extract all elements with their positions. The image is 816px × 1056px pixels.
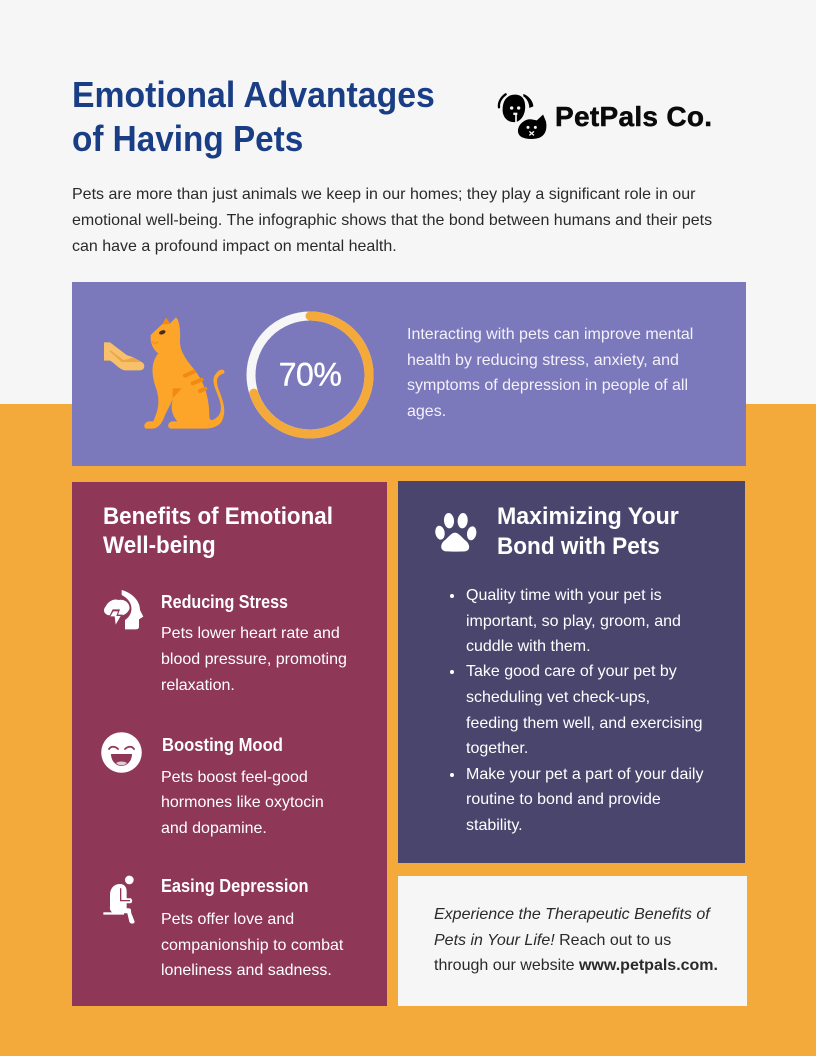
heading: maximizing: Maximizing Your [497, 503, 679, 530]
statistic description: health by reducing stress, anxiety, and [407, 352, 679, 368]
icon: head with storm [104, 590, 144, 630]
statistic description: symptoms of depression in people of all [407, 377, 688, 394]
bullet list: Make your pet a part of your daily [466, 766, 703, 783]
panel: benefits [72, 482, 387, 1006]
icon: dog and cat [498, 93, 546, 139]
bullet list: scheduling vet check-ups, [466, 689, 650, 706]
bullet list: cuddle with them. [466, 638, 591, 655]
bullet list: important, so play, groom, and [466, 612, 681, 630]
bullet list: Quality time with your pet is [466, 587, 662, 604]
item: boosting mood: Boosting Mood [162, 735, 283, 755]
call to action text: Experience the Therapeutic Benefits of [434, 906, 710, 923]
item: reducing stress: relaxation. [161, 677, 235, 694]
icon: hand and cat [104, 318, 224, 429]
intro text [72, 186, 712, 254]
icon: seated person [103, 876, 135, 924]
icon: paw [435, 513, 476, 552]
heading: benefits: Well-being [103, 532, 216, 559]
heading: maximizing: Bond with Pets [497, 533, 660, 560]
bullet list: together. [466, 740, 528, 757]
call to action text: through our website www.petpals.com. [434, 957, 718, 974]
item: easing depression: loneliness and sadness. [161, 962, 332, 979]
logo: PetPals Co. [498, 93, 712, 139]
item: boosting mood [101, 732, 324, 837]
item: reducing stress [104, 590, 347, 694]
bullet list [450, 587, 704, 834]
bullet list: feeding them well, and exercising [466, 715, 703, 732]
donut chart: 70% [246, 312, 374, 438]
item: boosting mood: Pets boost feel-good [161, 769, 308, 786]
intro text: Pets are more than just animals we keep in our homes; they play a significant role in our [72, 186, 695, 202]
item: reducing stress: blood pressure, promoting [161, 651, 347, 668]
bullet list: stability. [466, 817, 523, 834]
heading: benefits [103, 503, 333, 559]
item: reducing stress: Pets lower heart rate and [161, 625, 340, 642]
statistic description: ages. [407, 403, 446, 420]
statistic description [407, 326, 693, 420]
call to action text: Pets in Your Life! Reach out to us [434, 932, 671, 949]
item: easing depression [103, 876, 344, 979]
logo wordmark: PetPals Co. [555, 101, 712, 132]
item: reducing stress: Reducing Stress [161, 592, 288, 612]
item: boosting mood: and dopamine. [161, 820, 267, 837]
intro text: emotional well-being. The infographic shows that the bond between humans and their pets [72, 212, 712, 228]
call to action text [434, 906, 718, 974]
bullet list: Take good care of your pet by [466, 663, 677, 680]
item: easing depression: Pets offer love and [161, 911, 294, 928]
bullet list: routine to bond and provide [466, 791, 661, 808]
heading: benefits: Benefits of Emotional [103, 503, 333, 530]
intro text: can have a profound impact on mental health. [72, 238, 397, 254]
panel: 70% statistic [72, 282, 746, 466]
icon: laughing face [101, 732, 142, 773]
title [72, 74, 435, 159]
panel: maximizing your bond [398, 481, 745, 863]
item: easing depression: companionship to combat [161, 937, 343, 954]
title: Emotional Advantages [72, 74, 435, 115]
item: boosting mood: hormones like oxytocin [161, 794, 324, 811]
donut chart: 70%: 70% [279, 356, 341, 392]
heading: maximizing [497, 503, 679, 560]
item: easing depression: Easing Depression [161, 876, 308, 896]
title: of Having Pets [72, 118, 303, 159]
statistic description: Interacting with pets can improve mental [407, 326, 693, 343]
orange background band [0, 404, 816, 1056]
panel: call to action [398, 876, 747, 1006]
